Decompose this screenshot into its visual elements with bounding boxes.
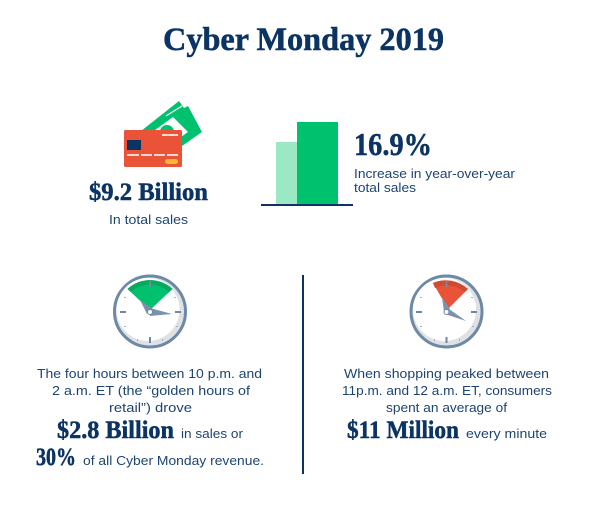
total sales stat: $9.2 Billion — [89, 179, 208, 206]
divider — [302, 275, 304, 474]
right text block: spent an average of — [386, 400, 507, 415]
left text block: $2.8 Billion — [57, 417, 174, 444]
left text block: 30% — [36, 444, 76, 471]
icon: clock red — [411, 276, 482, 347]
year-over-year stat: 16.9% — [354, 126, 432, 162]
left text block: in sales or — [181, 426, 244, 441]
left text block — [36, 366, 264, 471]
bar chart — [261, 122, 353, 206]
left text block: of all Cyber Monday revenue. — [83, 453, 264, 468]
total sales stat: In total sales — [109, 212, 189, 227]
left text block: retail”) drove — [109, 400, 192, 415]
title: Cyber Monday 2019 — [163, 22, 444, 58]
icon: clock green — [114, 276, 186, 347]
icon: credit card and cash — [124, 101, 202, 167]
right text block: 11p.m. and 12 a.m. ET, consumers — [342, 383, 553, 398]
right text block — [342, 366, 553, 444]
year-over-year stat — [354, 126, 516, 195]
right text block: When shopping peaked between — [344, 366, 549, 381]
year-over-year stat: Increase in year-over-year — [354, 166, 516, 181]
left text block: The four hours between 10 p.m. and — [37, 366, 262, 381]
right text block: $11 Million — [347, 417, 459, 444]
right text block: every minute — [466, 426, 547, 441]
year-over-year stat: total sales — [354, 180, 417, 195]
left text block: 2 a.m. ET (the “golden hours of — [52, 383, 250, 398]
total sales stat — [89, 179, 208, 227]
